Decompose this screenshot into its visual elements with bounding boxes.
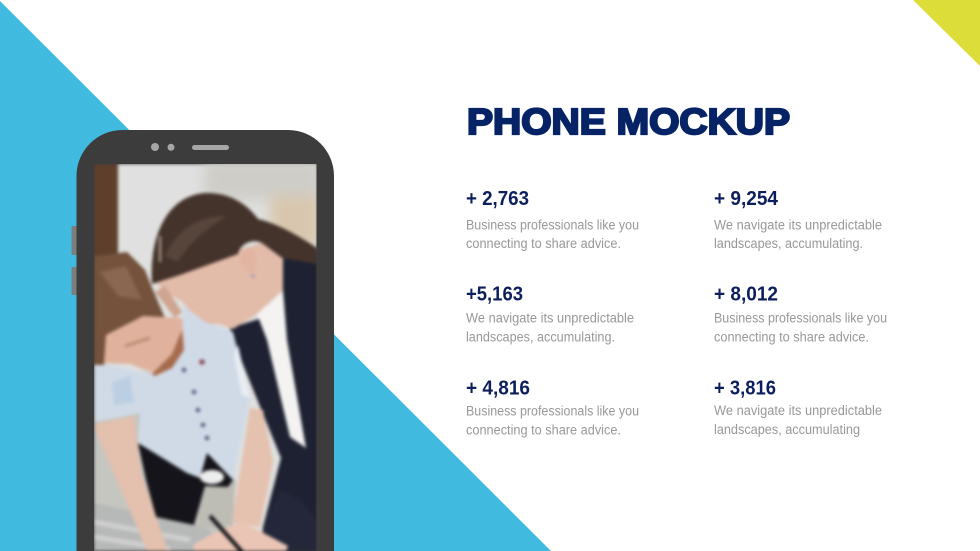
yellow corner triangle: [913, 0, 980, 66]
title: PHONE MOCKUP: [467, 101, 790, 142]
hands: [193, 522, 288, 551]
man's arms: [94, 416, 168, 551]
icon: phone side buttons: [72, 226, 77, 295]
stat: + 4,816: connecting to share advice.: [466, 423, 621, 438]
pen: [210, 516, 243, 551]
stat: + 8,012: + 8,012: [714, 284, 778, 306]
stat: + 4,816: [466, 378, 639, 438]
photo: two colleagues working at a desk: [94, 160, 320, 551]
woman's neck and face: [156, 243, 283, 329]
stat: + 2,763: connecting to share advice.: [466, 236, 621, 251]
woman's shirt: [257, 290, 306, 448]
woman's jacket: [230, 258, 317, 551]
phone camera and speaker: [151, 143, 229, 151]
stat: +5,163: landscapes, accumulating.: [466, 330, 615, 344]
stat: + 8,012: [714, 284, 887, 344]
phone mockup: [72, 130, 334, 551]
phone body: [76, 130, 334, 551]
stat: + 3,816: + 3,816: [714, 378, 776, 400]
stat: + 8,012: Business professionals like you: [714, 310, 887, 326]
stat: + 2,763: Business professionals like you: [466, 218, 639, 232]
stat: +5,163: We navigate its unpredictable: [466, 310, 634, 326]
man's hair, face and beard: [94, 252, 165, 365]
stat: +5,163: [466, 284, 634, 344]
stat: +5,163: +5,163: [466, 284, 523, 306]
stat: + 3,816: We navigate its unpredictable: [714, 403, 882, 418]
stat: + 3,816: landscapes, accumulating: [714, 422, 860, 437]
woman's hair: [152, 193, 317, 284]
stat: + 9,254: [714, 188, 882, 251]
stat: + 9,254: landscapes, accumulating.: [714, 236, 863, 251]
stat: + 4,816: + 4,816: [466, 378, 530, 400]
stat: + 9,254: We navigate its unpredictable: [714, 218, 882, 232]
stat: + 8,012: connecting to share advice.: [714, 330, 869, 344]
stat: + 2,763: [466, 188, 639, 251]
man's pants: [138, 443, 233, 525]
stat: + 3,816: [714, 378, 882, 437]
blue diagonal background triangle: [0, 1, 551, 551]
man's shirt: [94, 305, 250, 480]
stat: + 9,254: + 9,254: [714, 188, 779, 210]
stat: + 4,816: Business professionals like you: [466, 404, 639, 419]
stat: + 2,763: + 2,763: [466, 188, 529, 210]
